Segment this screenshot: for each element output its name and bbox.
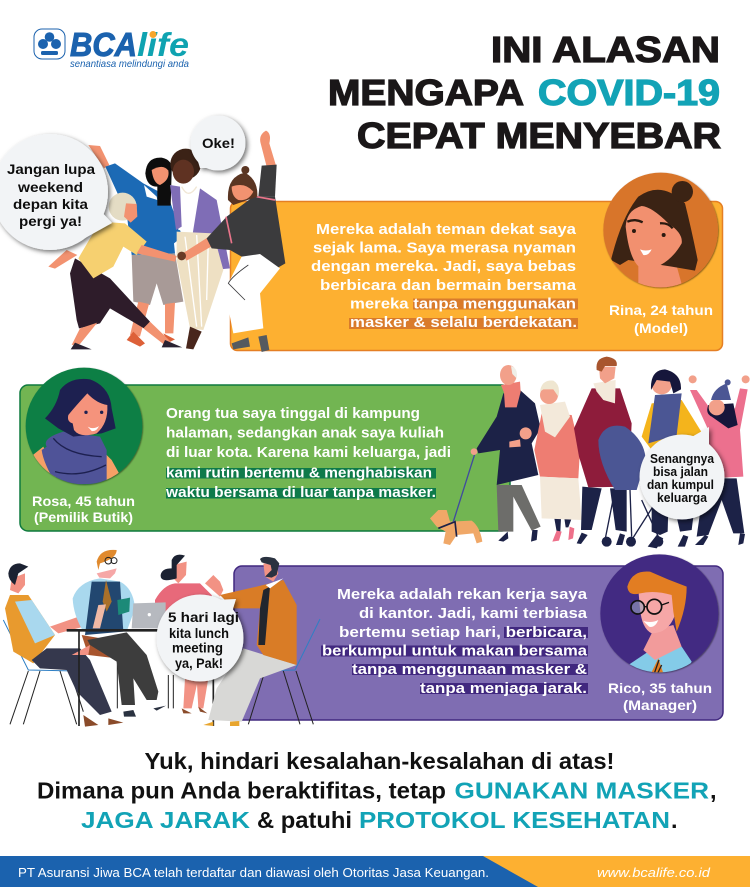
speech bubble: family: keluarga: [657, 491, 708, 505]
panel: orange friends story: berbicara dan bermain bersama: [320, 277, 577, 294]
speech bubble: oke: Oke!: [202, 135, 235, 151]
title: INI ALASAN: [491, 29, 720, 70]
panel: purple office story: Rico, 35 tahun: [608, 680, 712, 696]
title: COVID-19: [538, 72, 720, 113]
footer bar: [0, 856, 750, 887]
closing message: ,: [710, 778, 717, 804]
panel: green family story: halaman, sedangkan anak saya kuliah: [166, 424, 444, 442]
speech bubble: weekend: Jangan lupa: [7, 161, 95, 177]
title: [328, 29, 721, 156]
panel: orange friends story: dengan mereka. Jadi, saya bebas: [311, 258, 576, 275]
panel: green family story: kami rutin bertemu & menghabiskan: [166, 464, 432, 482]
speech bubble: weekend: [0, 134, 112, 250]
panel: orange friends story: [230, 202, 722, 350]
speech bubble: weekend: pergi ya!: [19, 213, 82, 229]
panel: purple office story: bertemu setiap hari, berbicara,: [339, 624, 587, 641]
logo: BCA life: life: [137, 26, 189, 63]
avatar: Rico: [600, 554, 718, 673]
logo: BCA life: senantiasa melindungi anda: [70, 58, 189, 70]
panel: green family story: [20, 385, 510, 531]
closing message: PROTOKOL KESEHATAN: [359, 807, 670, 833]
speech bubble: family: Senangnya: [650, 452, 715, 466]
speech bubble: oke: [190, 116, 246, 170]
panel: purple office story: tanpa menggunaan masker &: [352, 661, 587, 678]
speech bubble: lunch meeting: ya, Pak!: [175, 655, 223, 671]
title: MENGAPA: [328, 72, 524, 113]
speech bubble: lunch meeting: kita lunch: [169, 625, 229, 641]
panel: purple office story: berkumpul untuk makan bersama: [322, 642, 588, 660]
closing message: Yuk, hindari kesalahan-kesalahan di atas!: [144, 748, 614, 774]
panel: purple office story: di kantor. Jadi, kami terbiasa: [359, 605, 588, 622]
footer bar: www.bcalife.co.id: [597, 865, 711, 880]
panel: green family story: di luar kota. Karena kami keluarga, jadi: [166, 444, 451, 461]
people: family walking: [430, 357, 750, 548]
panel: purple office story: [234, 566, 723, 720]
people: office meeting: [3, 550, 320, 727]
closing message: GUNAKAN MASKER: [454, 778, 709, 804]
speech bubble: family: [640, 427, 724, 520]
panel: purple office story: Mereka adalah rekan kerja saya: [337, 586, 588, 603]
stroller: [598, 426, 663, 547]
speech bubble: lunch meeting: 5 hari lagi: [168, 609, 239, 625]
title: CEPAT MENYEBAR: [357, 115, 721, 156]
speech bubble: family: dan kumpul: [647, 478, 714, 492]
panel: orange friends story: masker & selalu berdekatan.: [350, 314, 577, 331]
panel: orange friends story: (Model): [634, 320, 688, 336]
avatar: Rina: [603, 173, 718, 293]
panel: purple office story: (Manager): [623, 697, 697, 713]
closing message: Dimana pun Anda beraktifitas, tetap: [37, 778, 446, 804]
speech bubble: family: bisa jalan: [653, 465, 708, 479]
avatar: Rosa: [26, 368, 142, 485]
panel: green family story: waktu bersama di luar tanpa masker.: [165, 484, 436, 501]
closing message: JAGA JARAK: [81, 807, 250, 833]
speech bubble: lunch meeting: [156, 594, 244, 682]
panel: green family story: Orang tua saya tinggal di kampung: [166, 405, 420, 422]
panel: orange friends story: Rina, 24 tahun: [609, 302, 713, 318]
closing message: .: [671, 807, 678, 833]
panel: purple office story: tanpa menjaga jarak.: [420, 680, 587, 697]
panel: orange friends story: mereka tanpa menggunakan: [350, 296, 576, 312]
panel: orange friends story: Mereka adalah teman dekat saya: [316, 221, 577, 238]
people: group of friends: [48, 131, 285, 352]
closing message: [37, 748, 717, 833]
dog: [430, 453, 482, 545]
panel: green family story: (Pemilik Butik): [34, 509, 133, 525]
speech bubble: weekend: weekend: [17, 179, 83, 195]
footer bar: PT Asuransi Jiwa BCA telah terdaftar dan diawasi oleh Otoritas Jasa Keuangan.: [18, 865, 489, 880]
closing message: & patuhi: [257, 807, 352, 833]
panel: green family story: Rosa, 45 tahun: [32, 493, 135, 509]
panel: orange friends story: sejak lama. Saya merasa nyaman: [313, 240, 576, 256]
speech bubble: weekend: depan kita: [13, 196, 88, 212]
logo: BCA life: [34, 26, 189, 70]
speech bubble: lunch meeting: meeting: [172, 640, 223, 656]
logo: BCA life: BCA: [70, 26, 137, 63]
